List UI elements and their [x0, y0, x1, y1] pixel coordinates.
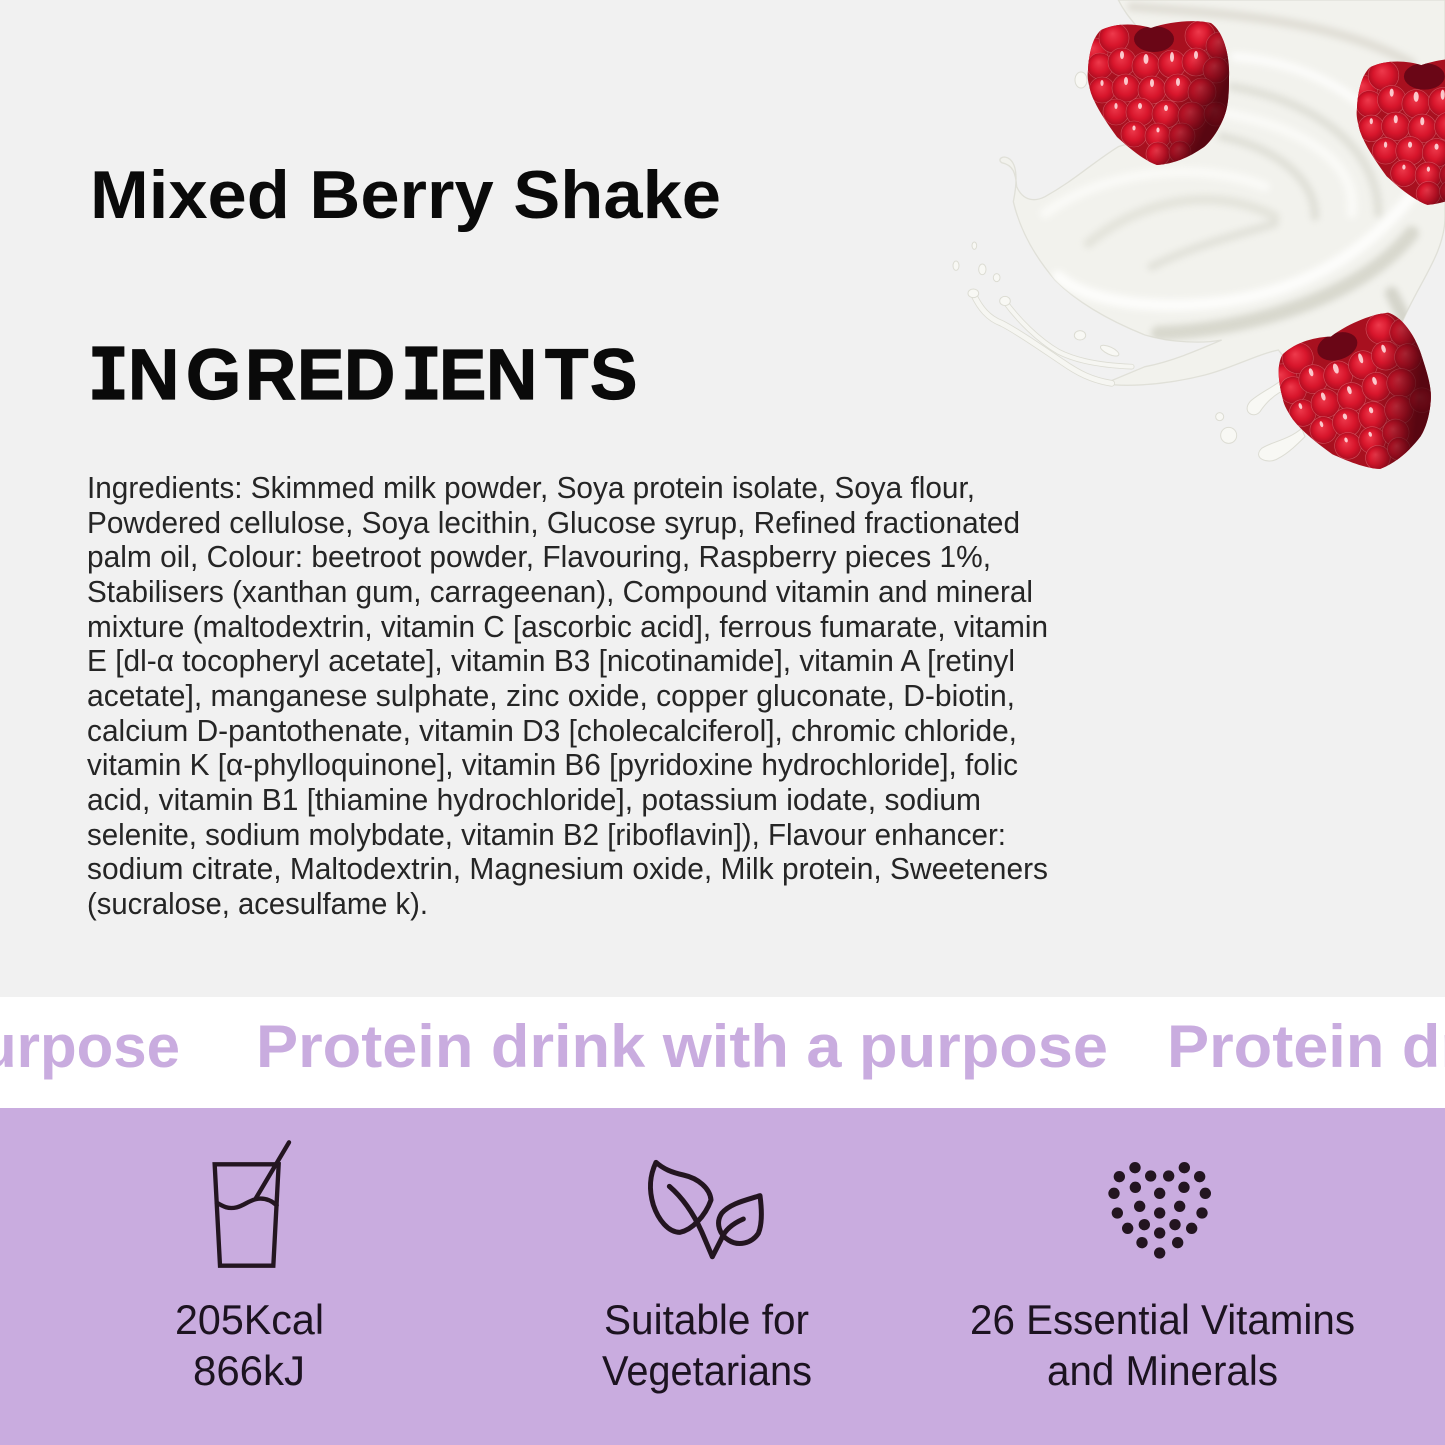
label: vitamins and minerals: and Minerals: [1047, 1347, 1278, 1394]
background panel: [0, 0, 1445, 997]
ingredients text block: E [dl-α tocopheryl acetate], vitamin B3 [nicotinamide], vitamin A [retinyl: [87, 643, 1015, 678]
label: vegetarians: Vegetarians: [602, 1347, 812, 1394]
milk splash illustration: [953, 0, 1445, 461]
raspberry bottom: [1259, 302, 1445, 496]
title: Mixed Berry Shake: [90, 157, 721, 233]
ingredients text block: Stabilisers (xanthan gum, carrageenan), Compound vitamin and mineral: [87, 574, 1033, 609]
ingredients text block: calcium D-pantothenate, vitamin D3 [cholecalciferol], chromic chloride,: [87, 713, 1017, 748]
icon: heart of dots: [1108, 1162, 1211, 1259]
ingredients text block: vitamin K [α-phylloquinone], vitamin B6 [pyridoxine hydrochloride], folic: [87, 747, 1018, 782]
banner text: [0, 1013, 1445, 1080]
label: calories: [175, 1296, 324, 1394]
label: vegetarians: [602, 1296, 812, 1394]
ingredients text block: acetate], manganese sulphate, zinc oxide, copper gluconate, D-biotin,: [87, 678, 1015, 713]
benefits panel: [0, 1108, 1445, 1445]
icon: leaves: [650, 1162, 761, 1257]
heading: ingredients: INGREDIENTS: [87, 333, 637, 416]
raspberry top: [1080, 20, 1234, 168]
milk swirl: [1000, 0, 1445, 385]
label: calories: 866kJ: [193, 1347, 305, 1394]
label: vitamins and minerals: 26 Essential Vitamins: [970, 1296, 1355, 1343]
ingredients text block: mixture (maltodextrin, vitamin C [ascorbic acid], ferrous fumarate, vitamin: [87, 609, 1048, 644]
milk droplets: [953, 72, 1305, 461]
banner text: Protein drink with a purpose: [256, 1013, 1108, 1080]
ingredients text block: palm oil, Colour: beetroot powder, Flavouring, Raspberry pieces 1%,: [87, 539, 991, 574]
label: calories: 205Kcal: [175, 1296, 324, 1343]
label: vitamins and minerals: [970, 1296, 1355, 1394]
ingredients text block: Powdered cellulose, Soya lecithin, Glucose syrup, Refined fractionated: [87, 505, 1020, 540]
ingredients text block: [87, 470, 1048, 921]
ingredients text block: acid, vitamin B1 [thiamine hydrochloride], potassium iodate, sodium: [87, 782, 981, 817]
ingredients text block: (sucralose, acesulfame k).: [87, 886, 428, 921]
icon: glass with straw: [215, 1142, 289, 1266]
banner: [0, 997, 1445, 1108]
label: vegetarians: Suitable for: [604, 1296, 809, 1343]
ingredients text block: Ingredients: Skimmed milk powder, Soya protein isolate, Soya flour,: [87, 470, 975, 505]
ingredients text block: selenite, sodium molybdate, vitamin B2 [riboflavin]), Flavour enhancer:: [87, 817, 1006, 852]
ingredients text block: sodium citrate, Maltodextrin, Magnesium oxide, Milk protein, Sweeteners: [87, 851, 1048, 886]
milk tendrils: [973, 294, 1132, 383]
raspberry right: [1349, 57, 1445, 208]
